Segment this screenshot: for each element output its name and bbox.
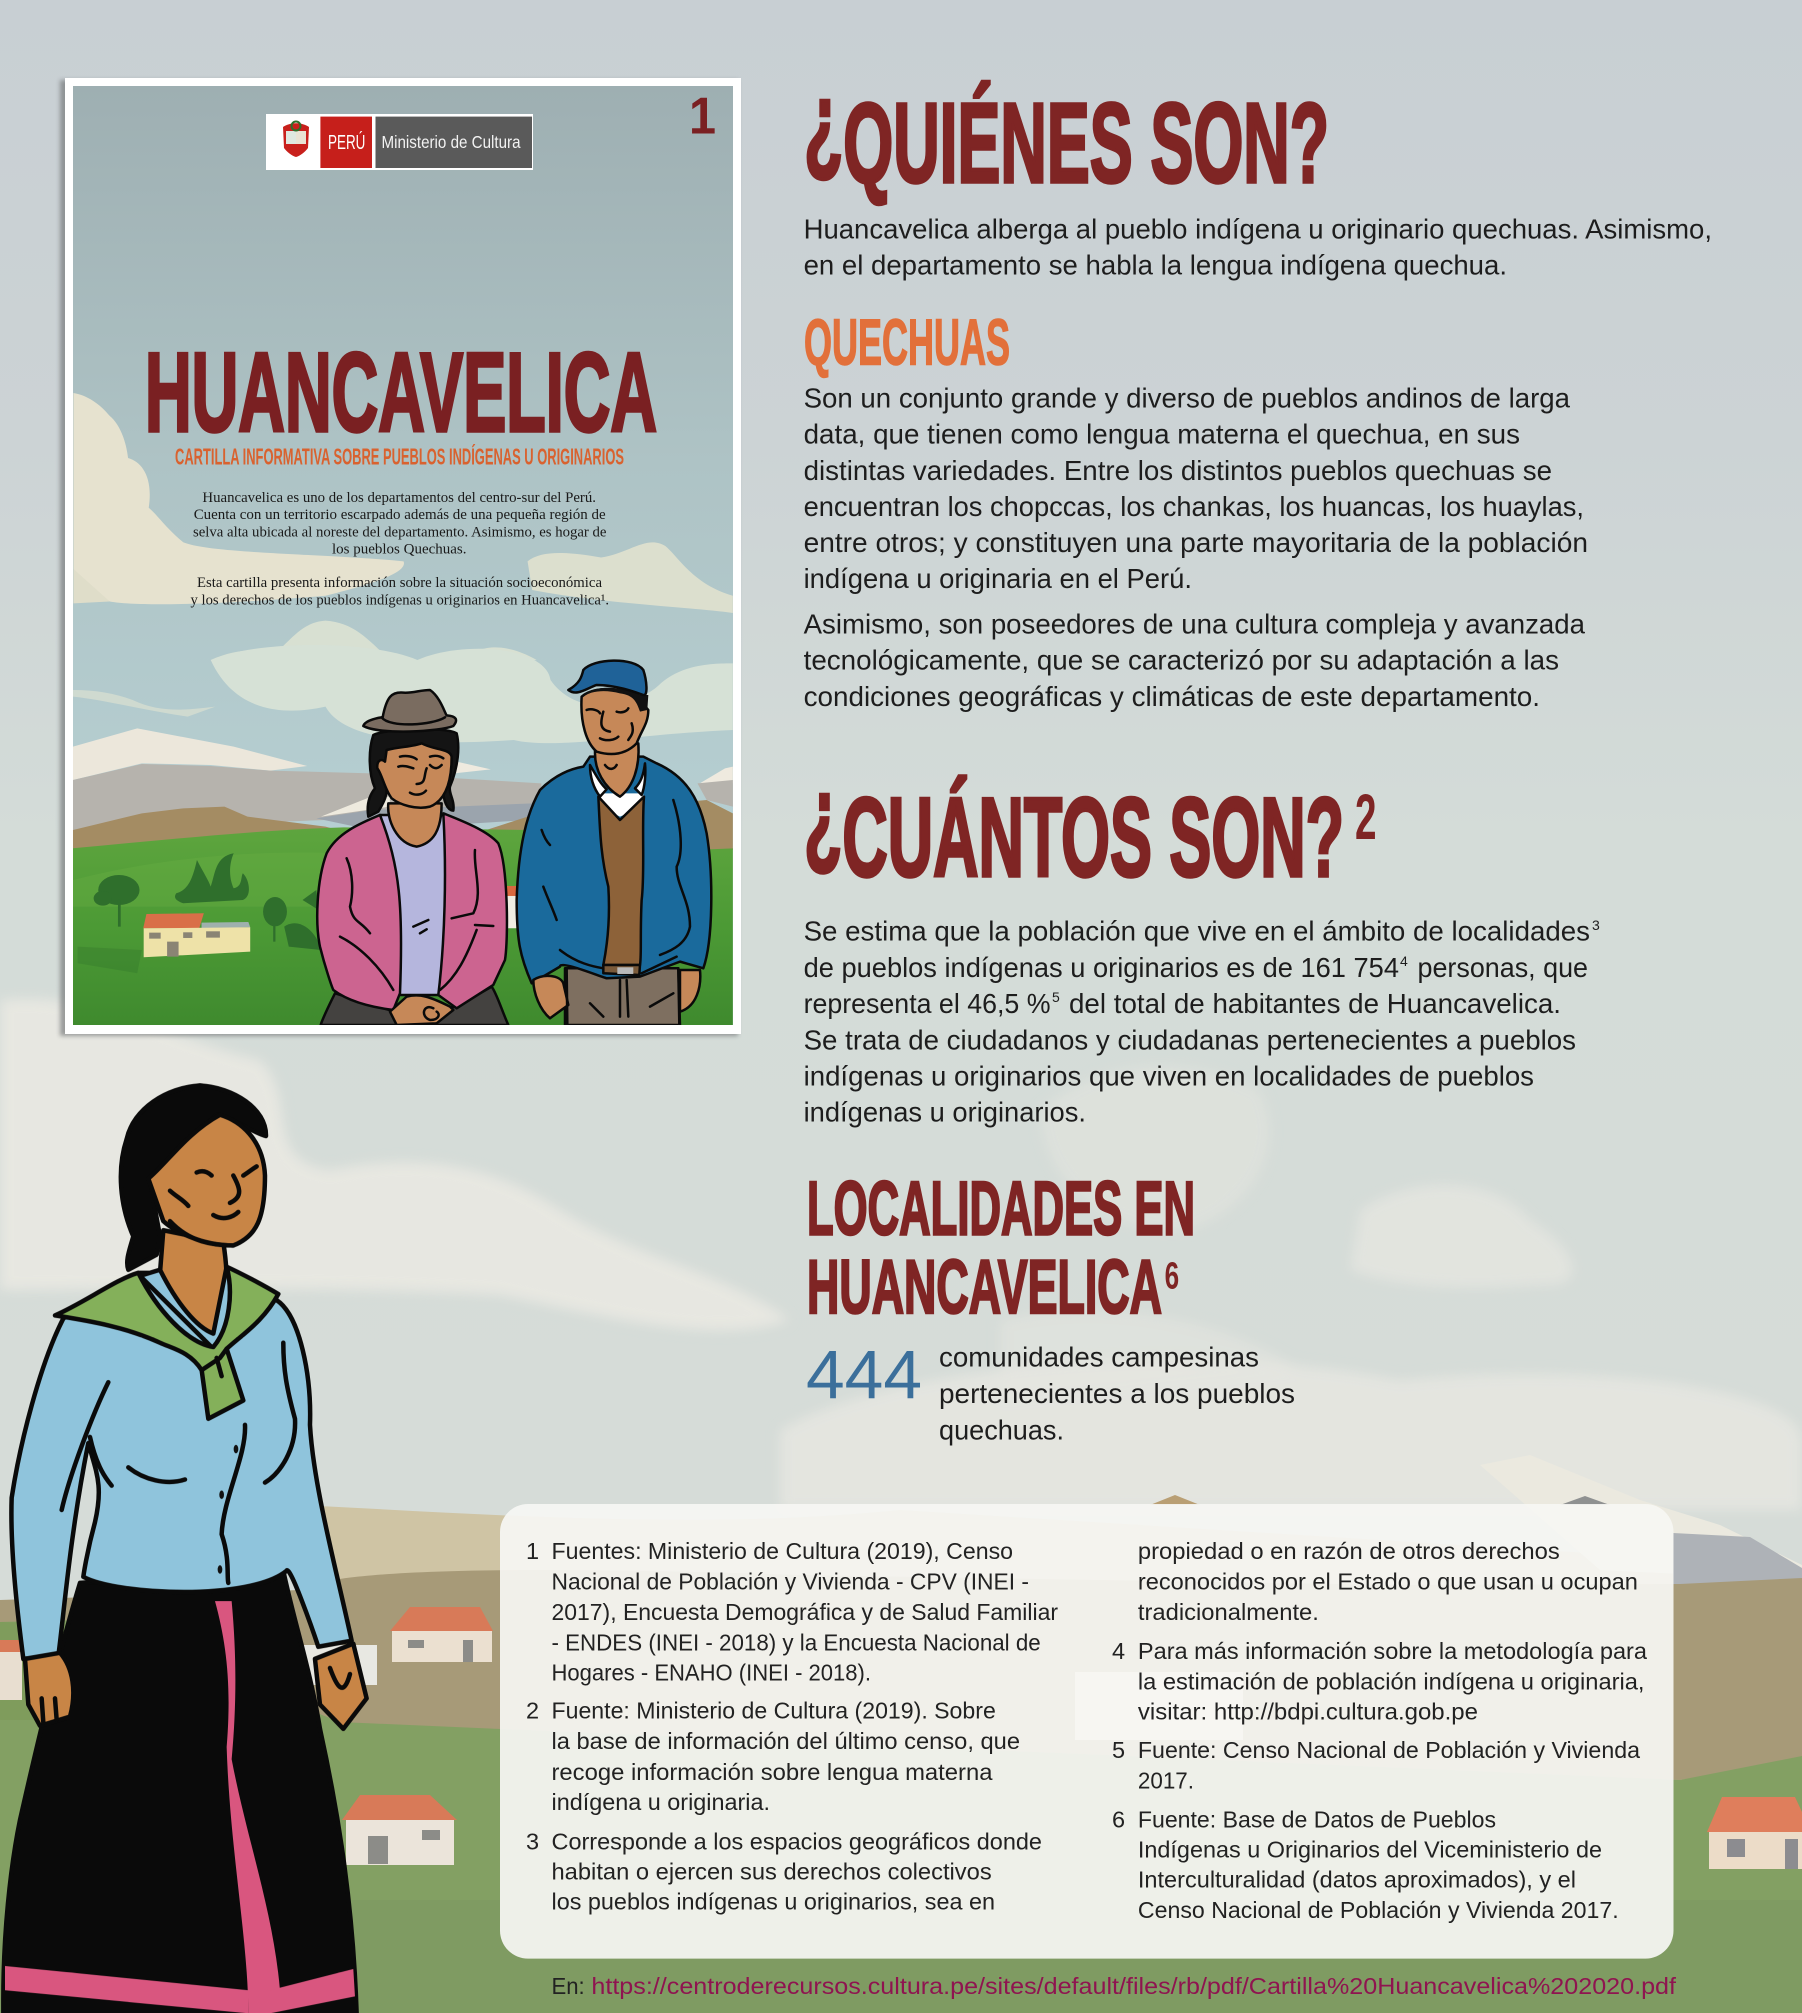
cover illustration [73, 86, 733, 1025]
figure: man with cap [517, 661, 711, 1025]
logo: Ministerio de Cultura: Ministerio de Cultura [382, 132, 521, 152]
cover shadow [60, 80, 738, 1036]
footnote 6: Indígenas u Originarios del Viceministerio de [1138, 1837, 1602, 1863]
cover house [143, 913, 250, 957]
intro text: Huancavelica alberga al pueblo indígena u originario quechuas. Asimismo, [804, 213, 1712, 244]
statistic: 444: 444 [806, 1336, 922, 1413]
hills behind the figures [300, 1505, 1802, 1800]
panel: how many [804, 753, 1600, 1446]
figure: woman with hat [317, 690, 508, 1025]
heading: Localidades en Huancavelica: LOCALIDADES EN [807, 1166, 1195, 1252]
footnote 1: - ENDES (INEI - 2018) y la Encuesta Nacional de [552, 1629, 1041, 1655]
statistic label [939, 1341, 1295, 1446]
population text: 3 [1592, 917, 1600, 933]
heading: Localidades en Huancavelica: HUANCAVELICA [807, 1245, 1162, 1330]
footnote 2 [526, 1698, 1020, 1815]
footnote 1: Nacional de Población y Vivienda - CPV (INEI - [552, 1568, 1029, 1594]
footnote 3: Corresponde a los espacios geográficos donde [552, 1828, 1042, 1854]
logo: Ministerio de Cultura [266, 114, 533, 170]
heading: ¿Quiénes son?: QUIÉNES SON? [843, 80, 1329, 206]
population text [804, 916, 1600, 1128]
footnote 4 [1112, 1638, 1648, 1725]
footnote 5: Fuente: Censo Nacional de Población y Vivienda [1138, 1737, 1641, 1763]
footnote 5: 2017. [1138, 1767, 1194, 1793]
footnote 5 [1112, 1737, 1641, 1793]
population text: Se estima que la población que vive en el ámbito de localidades [804, 916, 1590, 947]
cover description: Huancavelica es uno de los departamentos del centro-sur del Perú. [202, 490, 596, 506]
cover description: los pueblos Quechuas. [332, 542, 466, 558]
footnote 6: Censo Nacional de Población y Vivienda 2017. [1138, 1897, 1619, 1923]
icon: Peruvian coat of arms [283, 122, 309, 157]
footnote 3: tradicionalmente. [1138, 1599, 1319, 1625]
cover description: Esta cartilla presenta información sobre la situación socioeconómica [197, 575, 602, 591]
logo: Ministerio de Cultura: PERÚ [328, 131, 365, 154]
footnote 6 [1112, 1806, 1619, 1923]
Quechuas description: distintas variedades. Entre los distintos pueblos quechuas se [804, 455, 1552, 486]
Quechuas description: data, que tienen como lengua materna el quechua, en sus [804, 419, 1520, 450]
cover description: Cuenta con un territorio escarpado además de una pequeña región de [194, 507, 606, 523]
cover description: y los derechos de los pueblos indígenas u originarios en Huancavelica¹. [190, 593, 609, 609]
heading: ¿Cuántos son?: 2 [1355, 781, 1376, 853]
source link: https://centroderecursos.cultura.pe/sites/default/files/rb/pdf/Cartilla%20Huancavelica%202020.pdf [591, 1973, 1676, 1999]
statistic label: pertenecientes a los pueblos [939, 1378, 1295, 1409]
intro text: en el departamento se habla la lengua indígena quechua. [804, 249, 1507, 280]
Quechuas description: Asimismo, son poseedores de una cultura compleja y avanzada [804, 608, 1585, 639]
Quechuas description: entre otros; y constituyen una parte mayoritaria de la población [804, 527, 1588, 558]
footnote 3 [526, 1538, 1638, 1915]
panel: who they are [804, 58, 1712, 712]
footnote 3: 3 [526, 1828, 539, 1854]
footnote 2: la base de información del último censo, que [552, 1728, 1020, 1754]
heading: ¿Cuántos son? [804, 753, 1376, 900]
Quechuas description: tecnológicamente, que se caracterizó por su adaptación a las [804, 644, 1559, 676]
cover title: HUANCAVELICA [145, 330, 657, 455]
footnote 6: 6 [1112, 1806, 1125, 1832]
footnote 3: los pueblos indígenas u originarios, sea en [552, 1889, 995, 1915]
heading: Quechuas: QUECHUAS [804, 306, 1010, 378]
heading: ¿Quiénes son?: ¿ [804, 58, 843, 184]
population text: indígenas u originarios que viven en localidades de pueblos [804, 1060, 1534, 1092]
footnote 4: 4 [1112, 1638, 1125, 1664]
cover description [190, 490, 609, 609]
population text: de pueblos indígenas u originarios es de 161 754 [804, 952, 1399, 983]
population text: personas, que [1418, 952, 1588, 983]
footnote 1: Hogares - ENAHO (INEI - 2018). [552, 1660, 871, 1686]
footnote 4: la estimación de población indígena u originaria, [1138, 1668, 1644, 1694]
Quechuas description: condiciones geográficas y climáticas de este departamento. [804, 681, 1540, 712]
heading: Localidades en Huancavelica [807, 1166, 1195, 1330]
footnote 6: Fuente: Base de Datos de Pueblos [1138, 1806, 1496, 1832]
footnote 3: propiedad o en razón de otros derechos [1138, 1538, 1560, 1564]
heading: ¿Cuántos son?: ¿ [804, 753, 842, 878]
panel: cover booklet [60, 78, 741, 1036]
footnote 6: Interculturalidad (datos aproximados), y el [1138, 1867, 1576, 1893]
footnote 4: visitar: http://bdpi.cultura.gob.pe [1138, 1699, 1478, 1725]
footnote 5: 5 [1112, 1737, 1125, 1763]
intro text [804, 213, 1712, 280]
figure: large woman [3, 1086, 367, 2013]
source link: En: [552, 1973, 585, 1999]
houses [0, 1607, 1802, 1869]
population text: 5 [1052, 989, 1060, 1005]
population text: Se trata de ciudadanos y ciudadanas pertenecientes a pueblos [804, 1024, 1576, 1056]
footnote 3: habitan o ejercen sus derechos colectivos [552, 1858, 992, 1884]
cover subtitle: CARTILLA INFORMATIVA SOBRE PUEBLOS INDÍGENAS U ORIGINARIOS [175, 442, 624, 470]
population text: del total de habitantes de Huancavelica. [1069, 988, 1561, 1019]
panel: footnotes [500, 1504, 1674, 1959]
Quechuas description: encuentran los chopccas, los chankas, los huancas, los huaylas, [804, 491, 1584, 522]
Quechuas description: Son un conjunto grande y diverso de pueblos andinos de larga [804, 383, 1570, 414]
population text: indígenas u originarios. [804, 1097, 1086, 1128]
heading: ¿Cuántos son?: CUÁNTOS SON? [842, 775, 1344, 900]
population text: 4 [1400, 953, 1408, 969]
footnote 1 [526, 1538, 1058, 1686]
cover description: selva alta ubicada al noreste del departamento. Asimismo, es hogar de [193, 524, 607, 540]
Quechuas description [804, 383, 1588, 712]
Quechuas description: indígena u originaria en el Perú. [804, 563, 1192, 594]
footnote 2: Fuente: Ministerio de Cultura (2019). Sobre [552, 1698, 996, 1724]
statistic label: comunidades campesinas [939, 1341, 1259, 1372]
cover frame [65, 78, 741, 1034]
footnote 1: 1 [526, 1538, 539, 1564]
footnote 2: indígena u originaria. [552, 1789, 770, 1815]
footnote 4: Para más información sobre la metodología para [1138, 1638, 1648, 1664]
footnote 1: 2017), Encuesta Demográfica y de Salud Familiar [552, 1599, 1058, 1625]
footnote 1: Fuentes: Ministerio de Cultura (2019), Censo [552, 1538, 1013, 1564]
footnote 3: reconocidos por el Estado o que usan u ocupan [1138, 1568, 1638, 1594]
footnote 2: recoge información sobre lengua materna [552, 1759, 993, 1785]
population text: representa el 46,5 % [804, 988, 1050, 1019]
heading: Localidades en Huancavelica: 6 [1165, 1256, 1179, 1298]
footnote 2: 2 [526, 1698, 539, 1724]
page number: 1 [689, 88, 716, 146]
statistic label: quechuas. [939, 1415, 1064, 1446]
